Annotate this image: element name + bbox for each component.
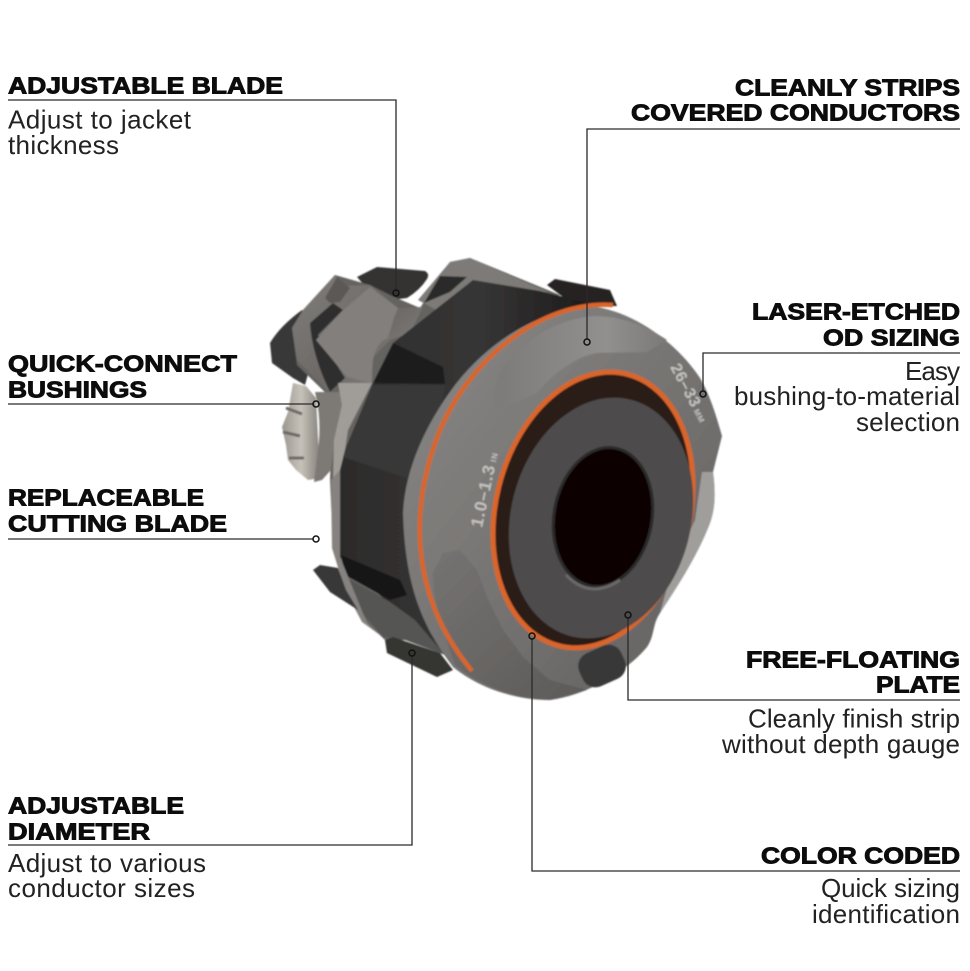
quick-connect bushing teeth <box>282 383 320 480</box>
callout: laser-etched od sizing: OD SIZING <box>823 324 960 350</box>
bushing collar <box>314 392 345 482</box>
callout: color coded: Quick sizing <box>821 873 960 903</box>
etched size label 26-33 mm: 26–33 MM <box>666 361 712 425</box>
upper light strip <box>333 383 372 480</box>
callout: cleanly strips covered conductors: CLEANLY STRIPS <box>735 74 960 100</box>
band upper rib <box>373 343 445 384</box>
callout: adjustable diameter: conductor sizes <box>8 873 195 903</box>
inner orange ring <box>465 351 721 669</box>
black adjustable band <box>340 280 592 664</box>
callout: adjustable diameter: ADJUSTABLE <box>8 792 184 818</box>
callout: adjustable diameter: DIAMETER <box>8 818 150 844</box>
callout: free-floating plate: PLATE <box>876 672 960 698</box>
raised lower face facet <box>433 550 587 700</box>
callout: adjustable diameter: Adjust to various <box>8 848 206 878</box>
lower casting sweep <box>347 578 445 655</box>
callout: quick-connect bushings <box>8 350 319 407</box>
centre bore <box>543 440 663 594</box>
left rear lever <box>270 310 320 385</box>
callout: color coded: COLOR CODED <box>761 842 960 868</box>
callout: quick-connect bushings: BUSHINGS <box>8 376 147 402</box>
callout: replaceable cutting blade <box>8 484 319 542</box>
callout: laser-etched od sizing: selection <box>856 407 960 437</box>
bushing tooth notches <box>283 408 304 458</box>
etched size label 1.0-1.3 in: 1.0–1.3 IN <box>467 450 502 529</box>
callout: laser-etched od sizing: LASER-ETCHED <box>752 298 960 324</box>
callout: color coded <box>529 633 960 929</box>
callout: adjustable diameter <box>8 650 415 903</box>
callout: laser-etched od sizing <box>700 298 960 437</box>
casting underlay <box>292 258 560 640</box>
oval window <box>574 640 630 692</box>
callout: free-floating plate: FREE-FLOATING <box>746 646 960 672</box>
main front face <box>403 306 722 700</box>
free-floating plate <box>484 378 718 658</box>
lower adjustable diameter tab <box>385 637 453 677</box>
casting dark recess <box>310 303 345 392</box>
product illustration: cable stripper <box>270 258 722 700</box>
band middle panel <box>343 385 445 478</box>
heading: ADJUSTABLE BLADE <box>8 72 283 98</box>
callout: laser-etched od sizing: bushing-to-material <box>734 381 960 411</box>
callout: adjustable blade <box>8 72 399 296</box>
plate recess <box>466 352 720 668</box>
callout: laser-etched od sizing: Easy <box>905 356 960 386</box>
band lower rib <box>341 555 407 600</box>
callout: free-floating plate <box>625 612 960 759</box>
top dark slot <box>424 276 467 303</box>
outer orange ring <box>420 305 613 671</box>
rear adjustable blade lever <box>357 267 428 300</box>
callout: free-floating plate: Cleanly finish strip <box>748 704 960 734</box>
bore rim highlight <box>566 575 620 589</box>
casting window <box>325 277 350 303</box>
callout: free-floating plate: without depth gauge <box>721 729 960 759</box>
lower left lever <box>313 565 358 610</box>
callout: adjustable blade: thickness <box>8 130 119 160</box>
top right black tab <box>547 279 617 306</box>
callout: color coded: identification <box>812 899 960 929</box>
description: Adjust to jacket <box>8 104 192 134</box>
callout: cleanly strips covered conductors: COVERED CONDUCTORS <box>631 100 960 126</box>
callout: quick-connect bushings: QUICK-CONNECT <box>8 350 237 376</box>
callout: cleanly strips covered conductors <box>584 74 960 345</box>
rear casting body <box>292 275 423 393</box>
callout: replaceable cutting blade: CUTTING BLADE <box>8 510 227 536</box>
lower grey strip <box>331 470 384 638</box>
rear top casting <box>418 258 548 312</box>
casting front block <box>316 287 398 383</box>
callout: replaceable cutting blade: REPLACEABLE <box>8 484 204 510</box>
raised upper face facet <box>493 316 667 408</box>
right rim highlight <box>660 472 715 613</box>
